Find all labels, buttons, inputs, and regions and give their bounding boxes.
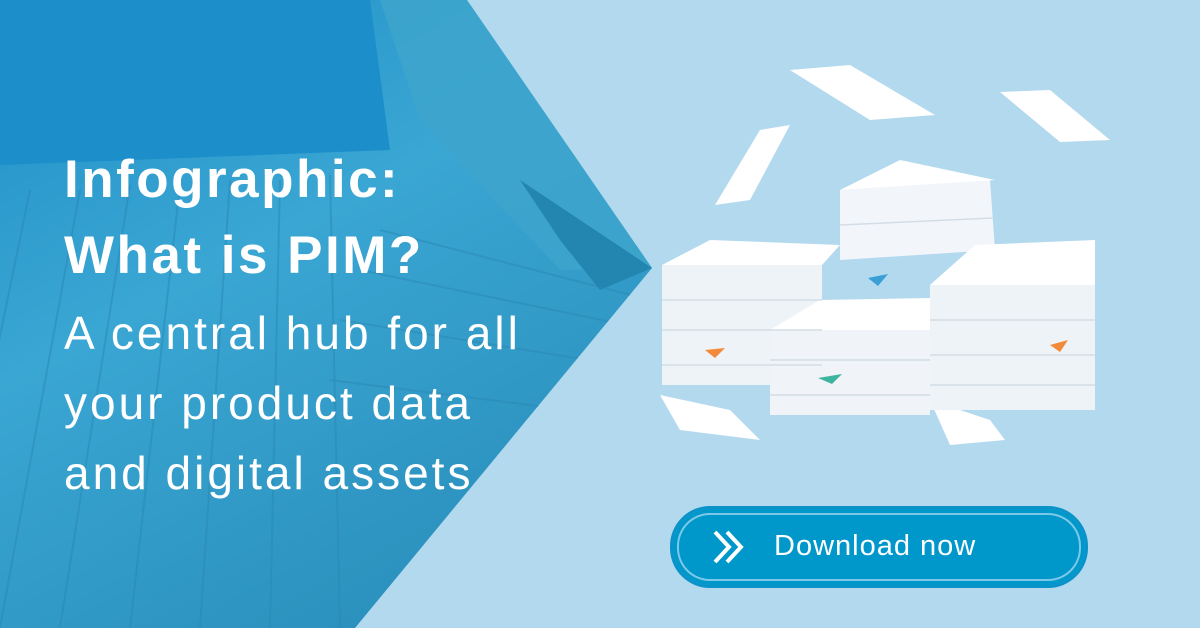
button label: Download now xyxy=(774,530,976,562)
illustration: paper stacks xyxy=(660,65,1110,445)
subtitle: A central hub for all xyxy=(64,307,521,359)
title: Infographic: xyxy=(64,150,400,209)
button: download now xyxy=(670,506,1088,588)
left photo panel xyxy=(0,0,652,628)
subtitle: your product data xyxy=(64,377,473,429)
icon: double chevron xyxy=(714,530,744,564)
subtitle xyxy=(64,307,521,499)
title xyxy=(64,150,424,285)
subtitle: and digital assets xyxy=(64,447,473,499)
title: What is PIM? xyxy=(64,226,424,285)
